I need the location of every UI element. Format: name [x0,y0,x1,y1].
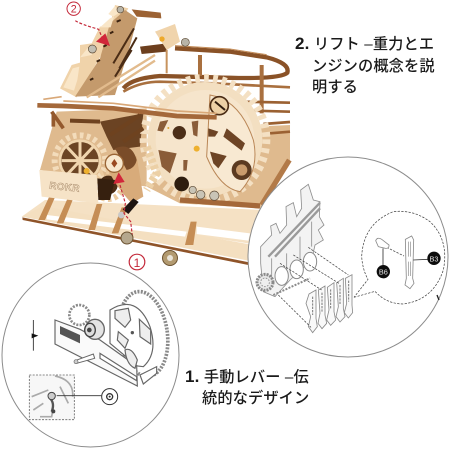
front gear wheel details [157,95,255,192]
panel: lift assembly detail circle [248,157,448,357]
text: lever heading [185,367,309,406]
callout number 1: 1 [134,256,141,270]
base plate [22,195,263,265]
upper marble track [123,46,290,133]
model backdrop [40,108,290,208]
red arrow 2 [75,21,110,46]
text: lever heading: 統的なデザイン [202,390,309,406]
detail drawings in crop coordinates [257,184,445,333]
left small gear [55,135,157,199]
loose marbles [121,232,178,266]
panel: lever assembly detail circle [2,263,179,447]
ROKR name plate: ROKR [49,181,80,195]
text: lift heading: 明する [312,79,358,96]
part label B6 [377,248,390,278]
part label B3: B3 [430,254,438,263]
name plate lettering [60,326,80,343]
large toothed gear [114,288,173,380]
small rear gear [69,305,89,325]
text: lift heading: ンジンの概念を説 [312,58,435,74]
lift cam wheels [273,252,317,295]
assembly guide lines [278,211,445,327]
steel marbles [88,6,219,200]
small gear [257,274,273,290]
callout number 1 [129,254,145,270]
crank roller [74,319,104,364]
inset detail box [29,375,74,420]
callout number 2 [67,2,80,16]
red arrow 1 [113,172,133,238]
large rear gear [144,78,266,201]
part leader and washer [57,389,118,405]
hand lever and crank [105,147,143,242]
small parts [376,236,414,289]
text: lift heading: 2. リフト –重力とエ [295,34,434,53]
lower middle track [37,97,289,206]
wooden marble run model [22,2,290,265]
dark interior behind tracks [100,113,143,150]
lift tower drawing [261,184,324,297]
part label B3 [413,252,441,265]
detail drawings in crop coordinates [29,288,173,420]
comb lever parts [306,275,353,333]
text: lift heading [295,34,435,96]
stair lift tower [60,5,180,97]
base plate [55,320,137,386]
edge mark [437,295,439,300]
text: lever heading: 1. 手動レバー –伝 [185,367,309,386]
section marker [32,320,38,351]
part label B6: B6 [379,268,388,277]
front wheel plate [100,304,157,384]
callout number 2: 2 [71,4,77,16]
ROKR name plate [39,168,115,203]
